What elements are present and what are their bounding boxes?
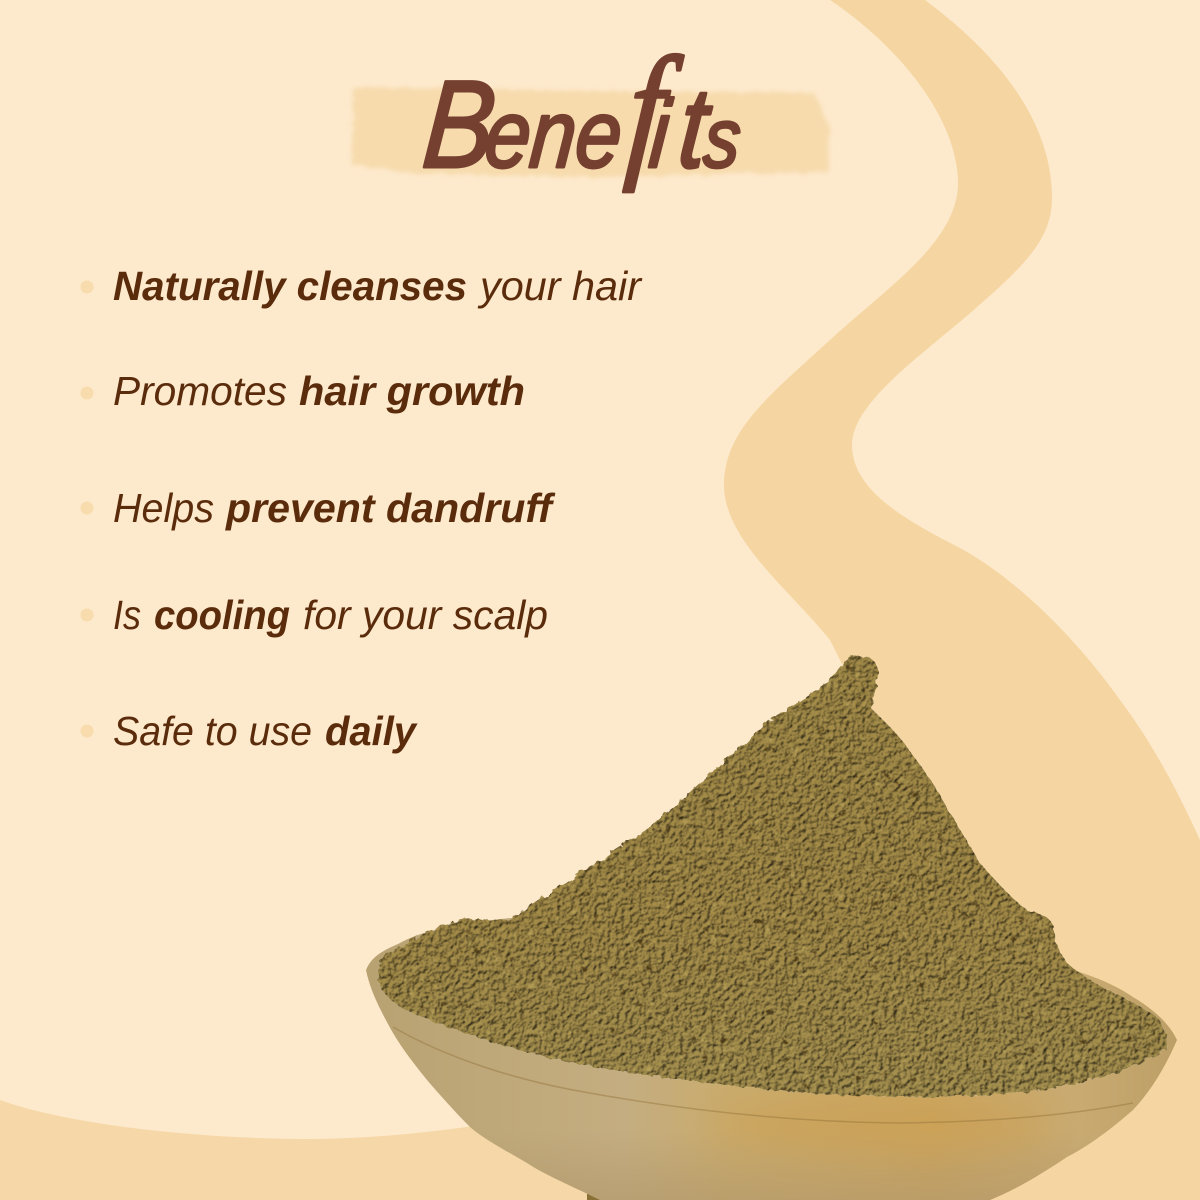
- text 2 regular: Promotes: [113, 368, 287, 414]
- title highlight brush stroke: [352, 87, 830, 177]
- title: f: [622, 28, 686, 193]
- text 5 regular: Safe to use: [113, 708, 312, 754]
- bullet 3: [80, 502, 94, 514]
- title: s: [700, 91, 744, 185]
- text 4 regular start: Is: [113, 592, 141, 638]
- text 5 bold: daily: [325, 708, 418, 754]
- bowl of powder: [360, 655, 1190, 1200]
- text 3 bold: prevent dandruff: [225, 485, 556, 531]
- title: t: [674, 65, 717, 192]
- text 4 regular end: for your scalp: [303, 592, 548, 638]
- bowl foot: [587, 1188, 657, 1200]
- swoosh band: [600, 0, 1200, 1200]
- title: ene: [481, 80, 627, 187]
- bullet 2: [80, 386, 94, 400]
- bowl engraved line: [393, 1027, 1133, 1123]
- benefit 4: [80, 592, 548, 638]
- text 3 regular: Helps: [113, 485, 214, 531]
- bullet 1: [80, 280, 94, 294]
- powder mound: [378, 655, 1167, 1097]
- bowl body: [366, 918, 1177, 1200]
- text 4 bold: cooling: [154, 592, 290, 638]
- warm patch: [740, 1108, 1024, 1142]
- benefit 3: [80, 485, 556, 531]
- text 1 bold: Naturally cleanses: [113, 263, 467, 309]
- title: i: [646, 80, 675, 187]
- bottom band: [0, 1100, 700, 1200]
- title: B: [418, 56, 501, 194]
- benefit 5: [80, 708, 418, 754]
- text 2 bold: hair growth: [299, 368, 525, 414]
- benefit 2: [80, 368, 525, 414]
- bullet 5: [80, 724, 94, 738]
- text 1 regular: your hair: [477, 263, 643, 309]
- bullet 4: [80, 608, 94, 622]
- benefit 1: [80, 263, 643, 309]
- lower shadow: [546, 1164, 1054, 1200]
- bowl shading: [546, 1108, 1054, 1200]
